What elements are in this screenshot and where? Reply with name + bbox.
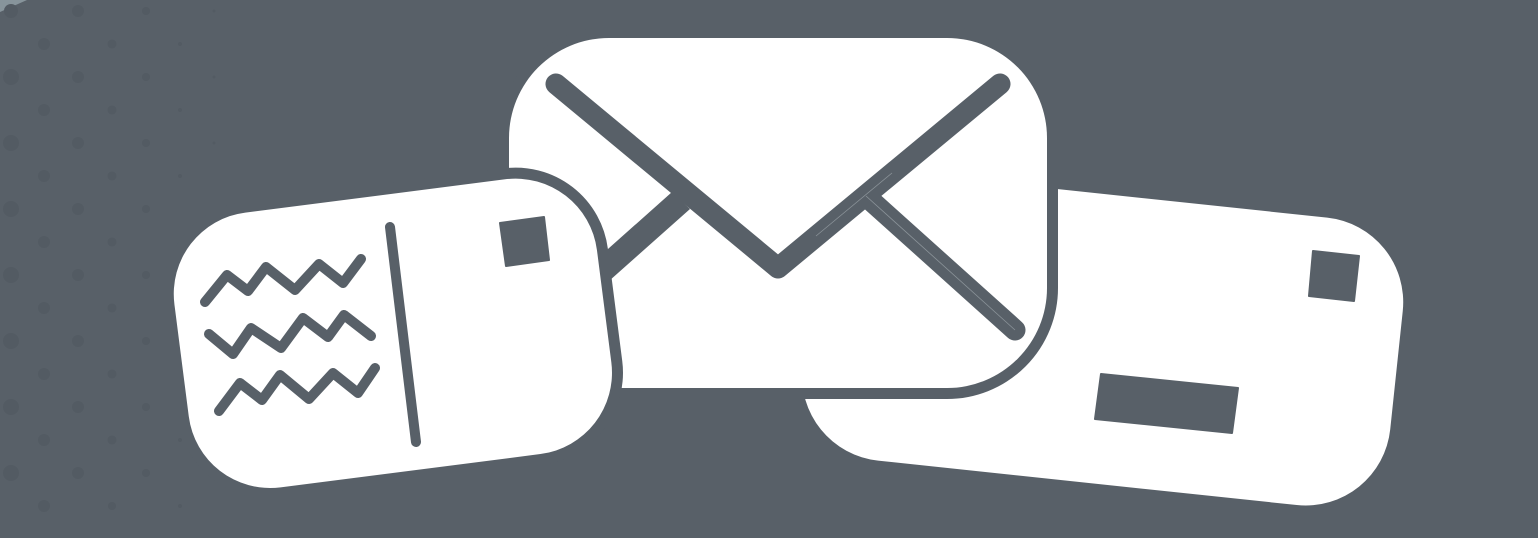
postcard handwriting xyxy=(205,259,375,411)
icon: back envelope with address slot and stamp xyxy=(794,164,1412,514)
icon: back envelope stamp xyxy=(1309,251,1359,301)
postcard stamp xyxy=(500,217,549,266)
icon: front envelope xyxy=(509,38,1047,388)
envelope right fold xyxy=(868,198,1015,330)
icon: postcard xyxy=(164,169,622,498)
postcard divider xyxy=(390,227,416,442)
envelope left fold xyxy=(590,192,690,289)
icon: back envelope address slot xyxy=(1095,374,1238,433)
envelope flap xyxy=(556,84,1000,268)
